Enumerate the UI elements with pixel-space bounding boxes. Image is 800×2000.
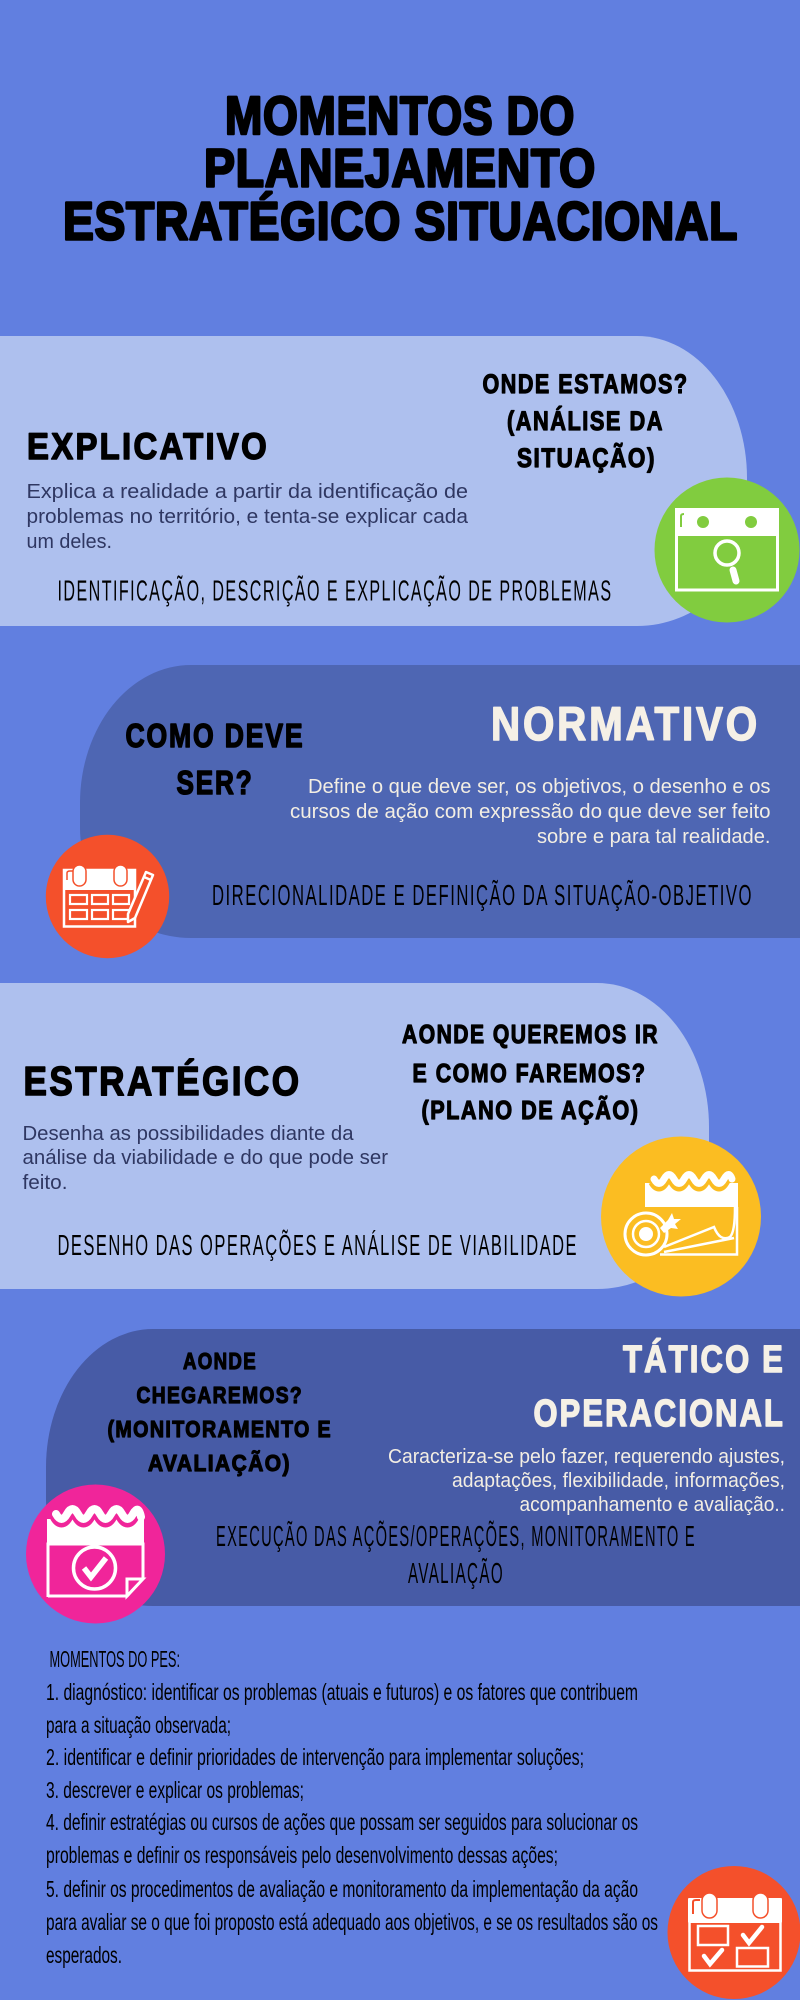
question: onde estamos [482,369,688,473]
description: cursos de ação com expressão do que deve ser feito [290,800,770,823]
description: adaptações, flexibilidade, informações, [452,1469,785,1492]
panel: normativo [80,665,800,938]
question: aonde queremos ir: AONDE QUEREMOS IR [402,1019,659,1049]
question: como deve ser [126,717,304,801]
question: aonde chegaremos: (MONITORAMENTO E [108,1416,332,1442]
question: aonde chegaremos: CHEGAREMOS? [136,1382,303,1408]
text block: momentos do pes: 3. descrever e explicar os problemas; [46,1777,304,1803]
question: onde estamos: ONDE ESTAMOS? [482,369,688,399]
question: onde estamos: SITUAÇÃO) [517,442,656,473]
text block: momentos do pes: MOMENTOS DO PES: [50,1646,180,1672]
band text [216,1521,696,1590]
title [63,86,738,252]
description: problemas no território, e tenta-se explicar cada [26,505,469,528]
text block: momentos do pes: problemas e definir os responsáveis pelo desenvolvimento dessas ações; [46,1842,558,1868]
icon: calendar with magnifier [654,478,800,622]
description: Desenha as possibilidades diante da [22,1122,354,1145]
description: Explica a realidade a partir da identificação de [26,480,468,503]
description: um deles. [26,530,112,553]
question: aonde chegaremos: AVALIAÇÃO) [148,1449,291,1476]
question: como deve ser: COMO DEVE [126,717,304,754]
text block: momentos do pes [46,1646,658,1968]
panel: tático e operacional [46,1329,800,1606]
question: aonde queremos ir: E COMO FAREMOS? [412,1058,646,1088]
heading: estratégico: ESTRATÉGICO [24,1058,302,1104]
question: aonde chegaremos [108,1348,332,1476]
description: acompanhamento e avaliação.. [520,1493,785,1516]
description: Caracteriza-se pelo fazer, requerendo ajustes, [388,1445,785,1468]
icon: calendar with check [26,1484,165,1624]
heading: normativo: NORMATIVO [491,697,760,750]
heading: explicativo: EXPLICATIVO [27,426,269,467]
question: aonde queremos ir: (PLANO DE AÇÃO) [422,1095,640,1125]
question: aonde chegaremos: AONDE [183,1348,257,1374]
panel: explicativo [0,336,747,626]
description [26,480,469,553]
icon: calendar with pencil [46,835,169,958]
description [22,1122,388,1194]
question: aonde queremos ir [402,1019,659,1125]
description: Define o que deve ser, os objetivos, o desenho e os [308,775,770,798]
description [290,775,770,848]
description: feito. [22,1171,68,1194]
title: PLANEJAMENTO [204,138,596,198]
title: MOMENTOS DO [225,86,575,146]
description: sobre e para tal realidade. [537,825,770,848]
text block: momentos do pes: esperados. [46,1942,122,1968]
heading: tático e operacional [534,1337,785,1435]
icon: calendar with checklist [668,1866,800,1999]
description: análise da viabilidade e do que pode ser [22,1146,388,1169]
question: onde estamos: (ANÁLISE DA [507,405,664,436]
description [388,1445,785,1516]
text block: momentos do pes: para a situação observada; [46,1712,231,1738]
band text: AVALIAÇÃO [408,1558,504,1590]
icon: calendar with target [601,1136,761,1296]
panel: estratégico [0,983,709,1289]
question: como deve ser: SER? [176,764,254,801]
